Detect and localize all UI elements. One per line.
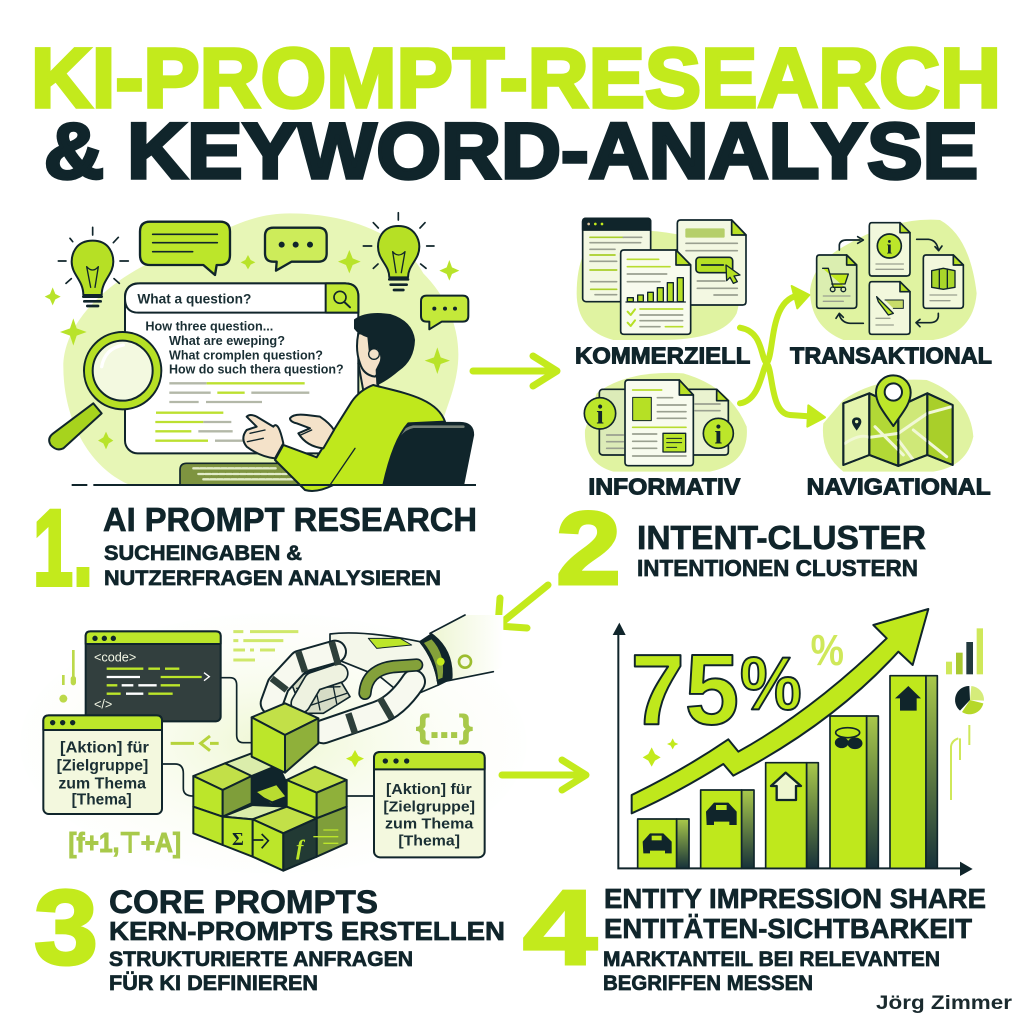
step 4 heading: 4 xyxy=(523,869,597,987)
step 4 heading: MARKTANTEIL BEI RELEVANTEN xyxy=(603,948,940,971)
keyboard xyxy=(180,463,307,485)
prompt card right text xyxy=(383,782,475,849)
blob kommerziell xyxy=(577,230,739,340)
step 2 heading xyxy=(556,491,926,607)
search text: What cromplen question? xyxy=(169,348,323,362)
code window xyxy=(86,631,221,721)
cube glyphs: Σ xyxy=(232,829,244,849)
blob informativ xyxy=(585,373,747,472)
75 percent: % xyxy=(740,641,802,725)
sparkles xyxy=(643,738,678,767)
hands xyxy=(243,415,283,458)
mini pie chart xyxy=(955,686,984,714)
blob navigational xyxy=(823,380,973,472)
label: KOMMERZIELL xyxy=(575,342,750,368)
label: INFORMATIV xyxy=(588,474,740,500)
icon: right light bulb xyxy=(363,213,434,290)
cube glyphs xyxy=(232,829,338,860)
step 4 heading: BEGRIFFEN MESSEN xyxy=(603,972,813,995)
document: cta xyxy=(677,220,746,305)
step 3 heading: KERN-PROMPTS ERSTELLEN xyxy=(109,916,505,946)
document: chart xyxy=(621,250,691,334)
step 1 heading xyxy=(33,487,477,608)
step 1 heading: SUCHEINGABEN & xyxy=(104,542,302,565)
panel: intent clusters xyxy=(575,218,992,500)
panel: core prompts illustration xyxy=(20,613,527,873)
formula and brace marks: [f+1,⊤+A] xyxy=(68,827,181,858)
code text xyxy=(94,651,209,711)
chair xyxy=(383,423,473,485)
mini bar chart xyxy=(946,628,983,674)
prompt card right text: zum Thema xyxy=(385,817,474,833)
connectors xyxy=(162,678,373,796)
arrow: step 2 to 3 xyxy=(498,585,548,628)
icon: coins xyxy=(836,728,862,748)
icon: left light bulb xyxy=(58,227,128,306)
prompt card right text: [Aktion] für xyxy=(386,782,472,798)
map with pin xyxy=(843,375,953,466)
search text xyxy=(137,290,344,377)
step 3 heading xyxy=(34,869,505,995)
mini lines xyxy=(951,725,969,800)
cube glyphs: f xyxy=(296,835,306,860)
author credit: Jörg Zimmer xyxy=(876,993,1013,1014)
decorative code marks xyxy=(233,632,298,660)
search text: What are eweping? xyxy=(169,334,285,348)
icon: house solid xyxy=(895,686,921,711)
label: TRANSAKTIONAL xyxy=(790,342,992,368)
prompt card left text: [Aktion] für xyxy=(60,740,149,757)
step 1 heading: AI PROMPT RESEARCH xyxy=(103,501,477,538)
small percent: % xyxy=(811,627,844,675)
curly connector xyxy=(740,286,825,427)
step 1 heading: 1. xyxy=(33,487,93,608)
icon: speech bubble with dots xyxy=(265,228,327,271)
step 4 heading xyxy=(523,869,986,995)
search text: What a question? xyxy=(137,290,251,306)
icon: house outline xyxy=(771,773,801,800)
step 2 heading: INTENTIONEN CLUSTERN xyxy=(637,555,918,581)
search text: How do such thera question? xyxy=(169,363,344,377)
growth arrow xyxy=(632,609,928,813)
prompt card right xyxy=(374,752,485,857)
magnifier xyxy=(49,332,161,449)
person xyxy=(243,314,445,491)
document: browser xyxy=(583,218,651,302)
label: NAVIGATIONAL xyxy=(807,474,991,500)
prompt card left text: zum Thema xyxy=(58,775,146,792)
code text: </> xyxy=(94,697,112,711)
step 1 heading: NUTZERFRAGEN ANALYSIEREN xyxy=(104,567,441,590)
bars xyxy=(638,676,937,868)
arrow: step 3 to 4 xyxy=(502,760,586,790)
75 percent: 75 xyxy=(631,634,739,746)
prompt card left xyxy=(43,715,162,814)
ground line xyxy=(72,482,476,488)
title: KI-PROMPT-RESEARCH xyxy=(31,31,1001,125)
title xyxy=(31,31,1001,195)
documents: informational xyxy=(584,380,733,466)
panel: AI prompt research illustration xyxy=(45,213,476,491)
step 4 heading: ENTITY IMPRESSION SHARE xyxy=(604,883,986,914)
documents: transaction cycle xyxy=(817,223,963,334)
panel: entity impression share chart xyxy=(613,609,984,876)
formula and brace marks: {...} xyxy=(416,708,473,744)
step 3 heading: FÜR KI DEFINIEREN xyxy=(109,972,318,995)
robot fingers xyxy=(272,642,417,733)
axes xyxy=(613,623,973,876)
pale background xyxy=(20,613,527,873)
icon: cars xyxy=(643,803,737,853)
result lines xyxy=(155,383,309,441)
prompt card right text: [Zielgruppe] xyxy=(383,799,475,815)
title: & KEYWORD-ANALYSE xyxy=(44,106,978,195)
prompt card right text: [Thema] xyxy=(398,833,460,849)
icon: large speech bubble xyxy=(140,222,230,275)
prompt card left text: [Thema] xyxy=(72,792,132,809)
documents: informational: i xyxy=(715,419,723,449)
back arrow mark xyxy=(171,736,219,751)
step 3 heading: 3 xyxy=(34,869,98,987)
icon: small speech bubble xyxy=(421,296,468,329)
formula and brace marks xyxy=(68,708,473,858)
cube stack xyxy=(193,703,347,871)
icons: sparkles xyxy=(45,250,459,449)
documents: informational: i xyxy=(596,399,604,429)
search window xyxy=(125,283,358,453)
75 percent xyxy=(631,634,802,746)
step 4 heading: ENTITÄTEN-SICHTBARKEIT xyxy=(604,913,972,944)
background blob xyxy=(63,213,458,485)
step 3 heading: CORE PROMPTS xyxy=(109,884,378,920)
arrow: step 1 to 2 xyxy=(473,356,557,386)
prompt card left text xyxy=(57,740,149,809)
search text: How three question... xyxy=(145,320,273,334)
step 2 heading: INTENT-CLUSTER xyxy=(637,519,926,556)
blob transaktional xyxy=(810,220,977,340)
prompt card left text: [Zielgruppe] xyxy=(57,758,148,775)
code text: <code> xyxy=(94,651,136,665)
documents: transaction cycle: i xyxy=(887,237,893,258)
step 3 heading: STRUKTURIERTE ANFRAGEN xyxy=(109,948,413,971)
step 2 heading: 2 xyxy=(556,491,621,607)
robot hand xyxy=(290,615,503,713)
sparkle xyxy=(346,750,364,767)
